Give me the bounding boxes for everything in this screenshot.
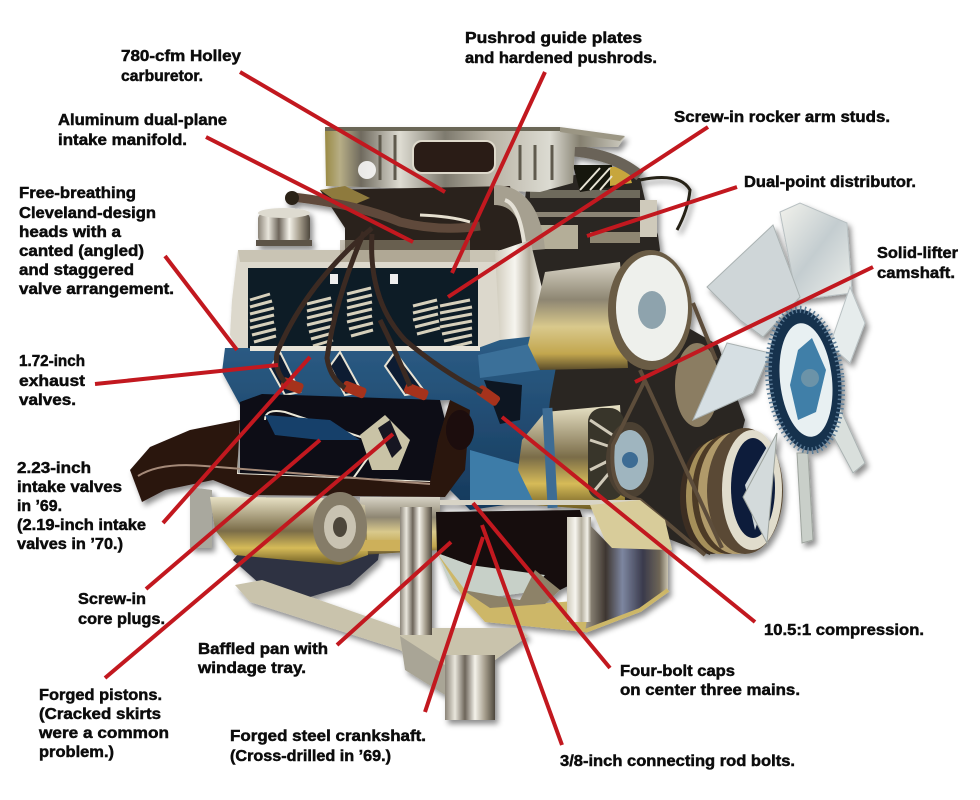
- oil filler cap: [256, 208, 312, 246]
- label: core plugs: [78, 591, 165, 628]
- cutaway block: [237, 394, 450, 490]
- alternator: [518, 405, 625, 510]
- distributor area details: [530, 150, 657, 249]
- label: carburetor: carburetor.: [121, 68, 203, 85]
- label: intake manifold: [58, 112, 227, 149]
- label: intake valves: intake valves: [17, 479, 122, 496]
- oil pan chamber: [436, 500, 640, 632]
- spark plug wires: [276, 228, 482, 392]
- label: intake valves: in ’69.: [17, 498, 62, 515]
- engine illustration: [130, 127, 865, 720]
- label: main caps: [620, 663, 800, 699]
- label: main caps: Four-bolt caps: [620, 663, 735, 680]
- label: pistons: (Cracked skirts: [39, 706, 161, 723]
- line: core plugs: [146, 440, 320, 589]
- callout leader lines: [95, 72, 873, 745]
- label: pushrods: [465, 30, 657, 67]
- label: exhaust valves: 1.72-inch: [19, 353, 85, 370]
- valve springs: [250, 288, 472, 348]
- label: intake valves: (2.19-inch intake: [17, 517, 146, 534]
- dark engine mass behind accessories: [500, 175, 745, 555]
- label: pistons: Forged pistons.: [39, 687, 162, 704]
- label: heads: and staggered: [19, 262, 134, 279]
- label: intake valves: valves in ’70.): [17, 536, 123, 553]
- label: carburetor: 780-cfm Holley: [121, 48, 241, 65]
- label: heads: Free-breathing: [19, 185, 136, 202]
- crank pulley stack: [680, 428, 783, 554]
- flywheel: [233, 535, 382, 597]
- label: connecting rod bolts: 3/8-inch connecting rod bolts.: [560, 753, 795, 770]
- label: pistons: were a common: [38, 725, 169, 742]
- fan hub: [762, 306, 848, 454]
- label: pushrods: and hardened pushrods.: [465, 50, 657, 67]
- line: intake manifold: [206, 137, 413, 242]
- label: heads: heads with a: [19, 224, 121, 241]
- label: exhaust valves: valves.: [19, 392, 76, 409]
- label: intake valves: [17, 460, 146, 553]
- label: exhaust valves: exhaust: [19, 373, 86, 390]
- large pulley ring behind blade: [675, 343, 719, 427]
- label: heads: Cleveland-design: [19, 205, 156, 222]
- label: crankshaft: [230, 728, 426, 765]
- line: exhaust valves: [95, 365, 278, 384]
- label: intake manifold: intake manifold.: [58, 132, 187, 149]
- spark plug boots: [280, 377, 501, 407]
- label: intake manifold: Aluminum dual-plane: [58, 112, 227, 129]
- label: camshaft: Solid-lifter: [877, 245, 958, 262]
- water pump pulley: [608, 250, 692, 370]
- line: pushrods: [452, 72, 545, 273]
- blue cylinder head band: [222, 335, 560, 510]
- cylinder head cover frame: [230, 240, 500, 352]
- pan gold edge: [585, 590, 668, 631]
- wire loop: [640, 178, 690, 230]
- line: crankshaft: [425, 537, 483, 712]
- label: camshaft: [877, 245, 958, 282]
- label: heads: canted (angled): [19, 243, 144, 260]
- bracket under alternator: [590, 500, 672, 552]
- line: compression: [502, 417, 755, 622]
- lower-left fan blades: [693, 343, 777, 543]
- line: distributor: [587, 187, 737, 236]
- label: baffled pan: windage tray.: [197, 660, 306, 677]
- drive belts: [612, 303, 722, 555]
- label: crankshaft: Forged steel crankshaft.: [230, 728, 426, 745]
- line: heads: [165, 256, 237, 350]
- label: heads: [19, 185, 174, 298]
- pan chrome right: [585, 525, 668, 632]
- starter: [190, 487, 400, 565]
- label: pushrods: Pushrod guide plates: [465, 30, 642, 47]
- chrome between starter and column: [360, 497, 440, 555]
- exhaust manifold: [130, 400, 474, 502]
- label: baffled pan: Baffled pan with: [198, 641, 328, 658]
- line: rocker studs: [448, 127, 708, 297]
- label: rocker studs: Screw-in rocker arm studs.: [674, 109, 890, 126]
- line: baffled pan: [337, 542, 451, 645]
- idler pulley: [606, 422, 654, 498]
- label: compression: 10.5:1 compression.: [764, 622, 924, 639]
- line: intake valves: [163, 357, 310, 523]
- label: core plugs: Screw-in: [78, 591, 146, 608]
- carburetor and hoses: [285, 186, 535, 250]
- label: baffled pan: [197, 641, 328, 677]
- label: exhaust valves: [19, 353, 86, 409]
- manifold chrome right of cover: [495, 240, 552, 345]
- label: crankshaft: (Cross-drilled in ’69.): [230, 748, 391, 765]
- line: pistons: [105, 434, 393, 678]
- label: intake valves: 2.23-inch: [17, 460, 91, 477]
- label: distributor: Dual-point distributor.: [744, 174, 916, 191]
- line: connecting rod bolts: [482, 525, 562, 745]
- label: main caps: on center three mains.: [620, 682, 800, 699]
- line: carburetor: [240, 72, 445, 192]
- air cleaner: [325, 127, 625, 192]
- label: camshaft: camshaft.: [877, 265, 955, 282]
- label: core plugs: core plugs.: [78, 611, 165, 628]
- label: heads: valve arrangement.: [19, 281, 174, 298]
- engine stand: [235, 507, 591, 720]
- label: carburetor: [121, 48, 241, 85]
- water pump housing: [528, 262, 628, 370]
- label: pistons: [38, 687, 169, 761]
- line: camshaft: [635, 267, 873, 382]
- valve pockets: [270, 352, 425, 395]
- line: main caps: [473, 503, 610, 668]
- label: pistons: problem.): [39, 744, 114, 761]
- fan blades: [707, 203, 865, 543]
